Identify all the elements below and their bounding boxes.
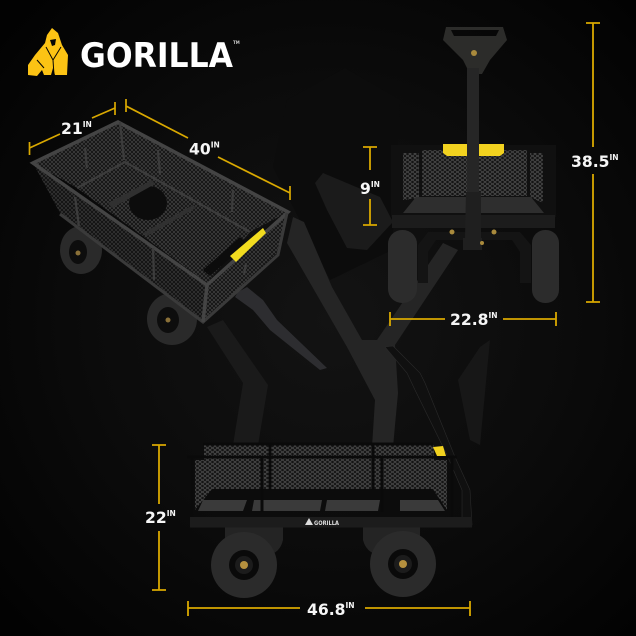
floor [198, 489, 446, 512]
handle [385, 346, 472, 525]
floor [77, 162, 250, 283]
near walls [33, 163, 207, 322]
watermark right band [458, 340, 490, 445]
back wall mesh [422, 150, 527, 196]
base rail [392, 215, 555, 228]
handle [235, 287, 327, 370]
label 22 in: IN [167, 509, 176, 518]
watermark lower-left band [207, 320, 268, 445]
side wall mesh [195, 460, 447, 510]
handle [443, 27, 507, 74]
back wheels [225, 526, 420, 555]
label 9 in: 9 [360, 180, 371, 198]
rails [187, 444, 457, 517]
rails [33, 122, 288, 285]
label 22 in: 22 [145, 509, 167, 527]
wheels [60, 226, 197, 345]
folded handle in bed [108, 180, 247, 276]
label 22.8 in: IN [488, 311, 498, 320]
label 22.8 in: 22.8 [450, 311, 488, 329]
bed floor [403, 197, 544, 213]
label 38.5 in: IN [609, 153, 619, 162]
cart: front view [388, 27, 559, 303]
dimension: 22.8 in [390, 312, 556, 326]
yellow grip [230, 228, 266, 262]
dimension: 38.5 in [586, 23, 600, 302]
watermark central Y band [287, 217, 458, 447]
label 21 in: 21 [61, 120, 83, 138]
label 21 in: IN [83, 120, 92, 129]
cart: side view [187, 346, 472, 598]
label 40 in: IN [211, 140, 220, 150]
trademark: TM [233, 40, 240, 45]
label 38.5 in: 38.5 [571, 153, 609, 171]
chassis rail [190, 517, 472, 528]
side wall mesh [403, 153, 543, 203]
dimension: 9 in [363, 147, 377, 225]
far walls [33, 122, 125, 188]
brand on rail [305, 518, 339, 527]
axle frame [418, 232, 531, 283]
yellow tab [433, 446, 446, 456]
label 9 in: IN [371, 180, 380, 189]
icon: gorilla [28, 28, 68, 76]
cart: top-left perspective view [33, 122, 327, 370]
label 46.8 in: IN [345, 601, 355, 610]
front wheel right [370, 531, 436, 597]
dimension: 40 in [126, 99, 290, 200]
bed frame [391, 145, 556, 217]
label 46.8 in: 46.8 [307, 601, 345, 619]
logo [28, 28, 240, 76]
wheels [388, 230, 559, 303]
yellow grip [443, 144, 504, 156]
brand on rail: GORILLA [314, 520, 339, 527]
watermark shoulders [273, 68, 400, 280]
wordmark: GORILLA [80, 36, 234, 76]
dimension: 46.8 in [188, 601, 470, 616]
gorilla watermark [207, 68, 490, 447]
watermark head [315, 173, 393, 250]
front wheel left [211, 532, 277, 598]
dimension: 21 in [30, 102, 115, 155]
back wall mesh [204, 445, 434, 489]
label 40 in: 40 [189, 140, 211, 158]
bolts [450, 50, 496, 245]
dimension: 22 in [152, 445, 166, 590]
